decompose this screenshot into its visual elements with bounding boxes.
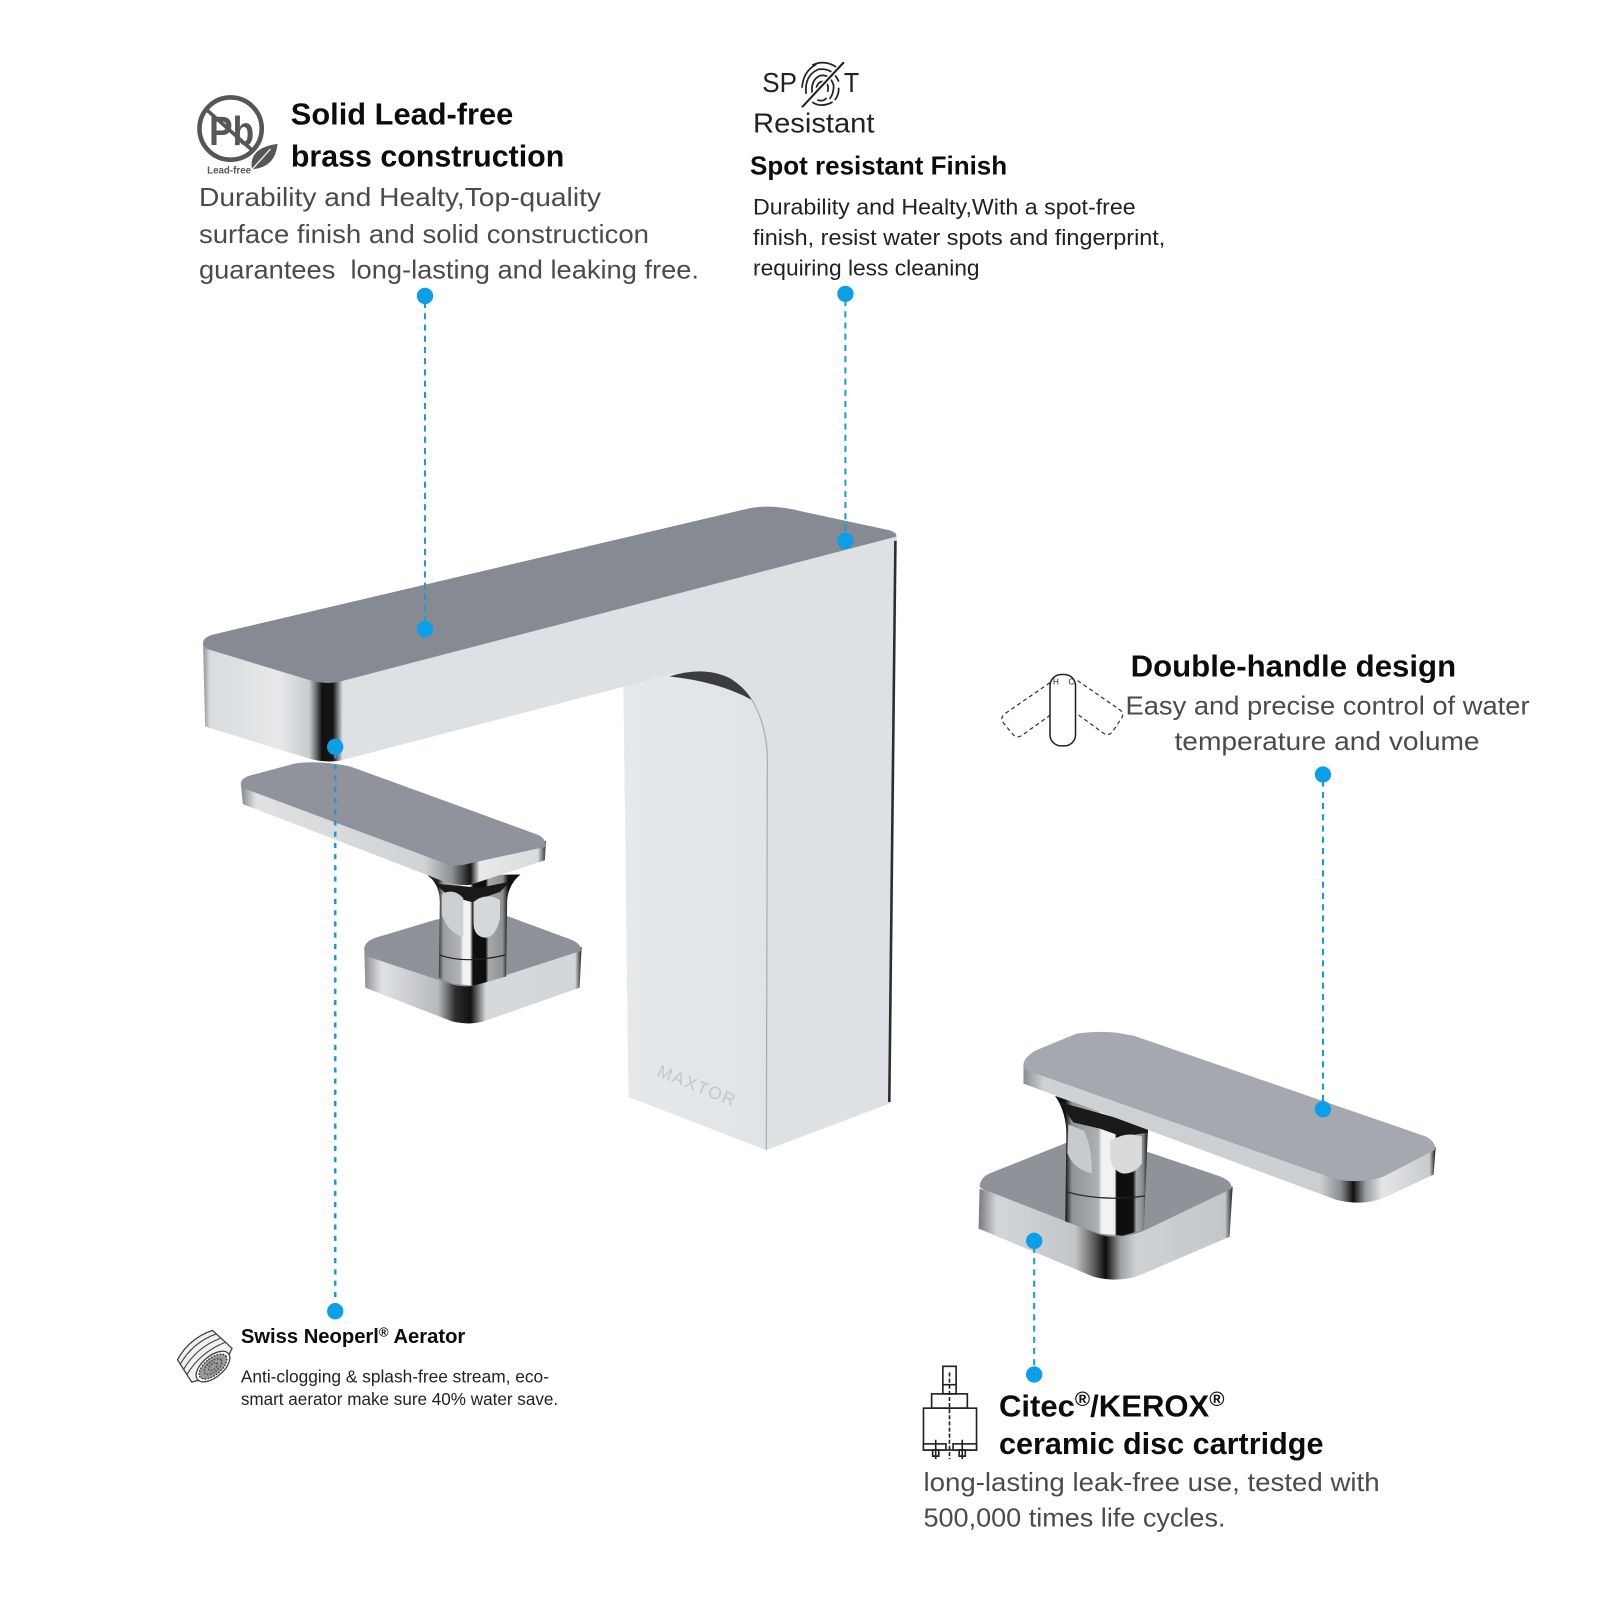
spout right chrome edge xyxy=(889,541,895,1102)
leader line xyxy=(1026,1233,1042,1383)
icon: spot resistant: T xyxy=(844,67,859,98)
icon: lead-free: Lead-free xyxy=(207,165,252,176)
spout underside dark arc xyxy=(669,671,752,700)
heading: ceramic disc cartridge xyxy=(999,1427,1323,1461)
icon: handle positions: H xyxy=(1053,678,1059,687)
right handle base side xyxy=(979,1187,1233,1280)
callout: double-handle design xyxy=(1002,650,1530,1117)
body text: Easy and precise control of water xyxy=(1126,692,1530,720)
icon: cartridge xyxy=(923,1366,977,1459)
heading: brass construction xyxy=(291,139,564,173)
body text: guarantees long-lasting and leaking free. xyxy=(199,257,699,285)
body text: requiring less cleaning xyxy=(753,256,980,281)
left handle xyxy=(241,762,582,1023)
spout leg edge line xyxy=(752,700,767,1150)
callout: lead-free xyxy=(199,97,699,637)
callout: aerator xyxy=(172,739,558,1409)
spout end face xyxy=(203,643,343,762)
left handle base top xyxy=(364,916,581,986)
body text xyxy=(923,1469,1380,1533)
leader line xyxy=(1315,766,1331,1117)
heading: ® xyxy=(1209,1389,1224,1411)
body text: finish, resist water spots and fingerprint, xyxy=(753,225,1165,250)
body text: Durability and Healty,With a spot-free xyxy=(753,194,1136,219)
heading xyxy=(291,97,564,173)
heading: Double-handle design xyxy=(1131,650,1456,684)
heading: ® xyxy=(379,1325,389,1340)
heading: Solid Lead-free xyxy=(291,97,513,131)
heading: ® xyxy=(1075,1389,1090,1411)
callout: spot resistant xyxy=(750,62,1165,549)
icon: spot resistant: SP xyxy=(762,67,797,98)
heading: Aerator xyxy=(389,1326,465,1348)
icon: lead-free: Pb xyxy=(209,108,254,154)
right handle base top xyxy=(980,1143,1232,1237)
icon: handle positions: C xyxy=(1068,678,1074,687)
spout front leg face xyxy=(623,673,767,1150)
right handle lever side xyxy=(1023,1065,1436,1203)
leader line xyxy=(837,286,854,549)
body text: surface finish and solid constructicon xyxy=(199,221,649,249)
icon: aerator xyxy=(172,1325,240,1392)
right handle xyxy=(979,1032,1436,1280)
icon: spot resistant xyxy=(753,62,875,139)
body text: Durability and Healty,Top-quality xyxy=(199,184,601,212)
brand mark: MAXTOR xyxy=(655,1061,740,1111)
icon: handle positions xyxy=(1002,674,1123,746)
left handle lever side xyxy=(241,784,546,885)
faucet spout xyxy=(203,507,897,1150)
callout: ceramic disc cartridge xyxy=(923,1233,1380,1533)
body text: temperature and volume xyxy=(1174,728,1480,756)
body text xyxy=(241,1367,558,1409)
body text: long-lasting leak-free use, tested with xyxy=(923,1469,1380,1497)
left handle stem xyxy=(428,874,520,986)
left handle base side xyxy=(364,947,582,1023)
spout top face xyxy=(203,507,896,683)
right handle stem xyxy=(1055,1096,1148,1236)
heading: Spot resistant Finish xyxy=(750,152,1007,180)
icon: spot resistant: Resistant xyxy=(753,108,875,139)
heading: Swiss Neoperl xyxy=(241,1326,380,1348)
leader line xyxy=(327,739,343,1319)
leader line xyxy=(417,288,433,637)
icon: lead-free xyxy=(199,97,278,176)
body text xyxy=(199,184,699,285)
left handle lever top xyxy=(241,762,545,866)
spout main body xyxy=(340,536,897,1150)
body text xyxy=(753,194,1165,281)
heading: /KEROX xyxy=(1090,1389,1210,1423)
body text: smart aerator make sure 40% water save. xyxy=(241,1389,558,1409)
body text: Anti-clogging & splash-free stream, eco- xyxy=(241,1367,549,1387)
right handle lever top xyxy=(1023,1032,1435,1181)
body text xyxy=(1126,692,1530,756)
heading: Citec xyxy=(999,1389,1074,1423)
body text: 500,000 times life cycles. xyxy=(923,1505,1226,1533)
heading xyxy=(999,1389,1323,1461)
